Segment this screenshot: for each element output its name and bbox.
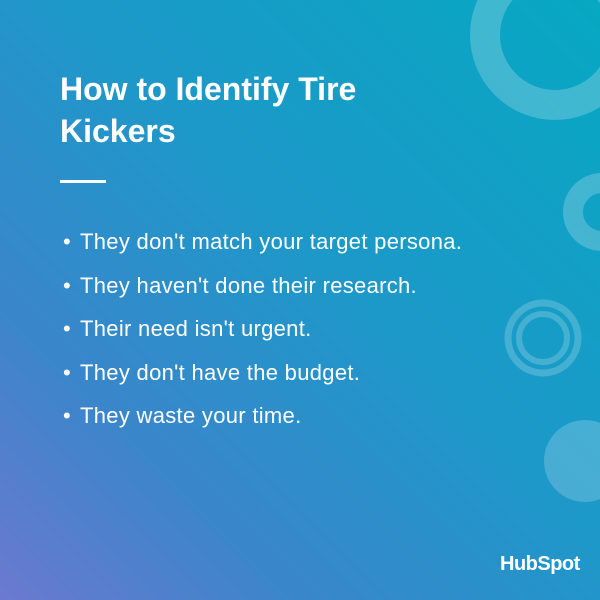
- divider underline: [60, 180, 106, 183]
- bullet list: [64, 229, 462, 428]
- bullet list: They waste your time.: [80, 403, 302, 428]
- bullet list: They don't have the budget.: [80, 360, 360, 384]
- bullet list: They don't match your target persona.: [80, 229, 462, 254]
- bullet list: They haven't done their research.: [80, 272, 417, 298]
- bullet list: Their need isn't urgent.: [80, 316, 312, 341]
- title: [60, 71, 356, 149]
- title: Kickers: [60, 113, 176, 149]
- logo: HubSpot: HubSpot: [500, 553, 580, 575]
- title: How to Identify Tire: [60, 71, 356, 107]
